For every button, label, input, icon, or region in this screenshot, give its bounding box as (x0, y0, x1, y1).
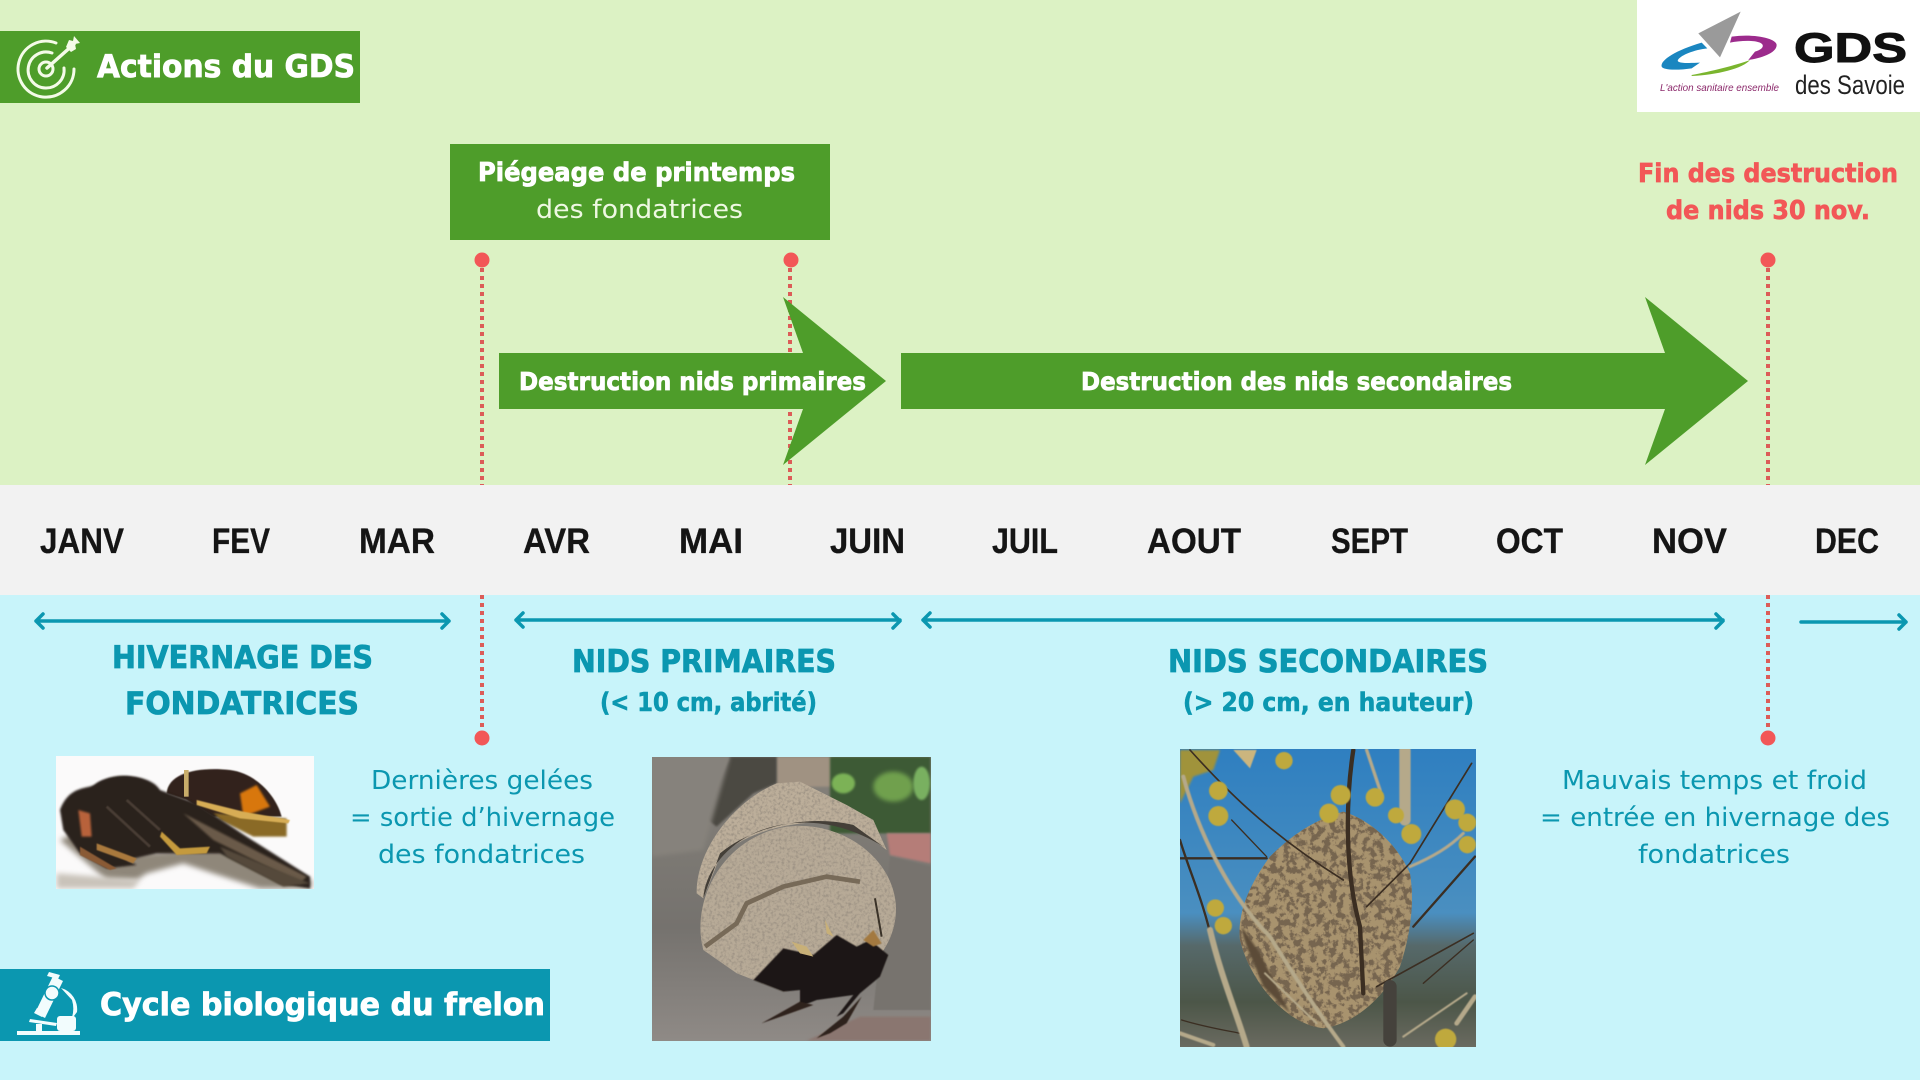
callout: fin des destructions (1638, 159, 1898, 226)
timeline: months: MAR (359, 522, 435, 561)
text: dernières gelées: Dernières gelées (371, 766, 593, 796)
callout: fin des destructions: Fin des destruction (1638, 159, 1898, 189)
timeline: months: JUIL (992, 522, 1058, 561)
arrows: period spans (36, 613, 1906, 629)
text: hivernage des fondatrices (112, 640, 373, 722)
timeline: months: AVR (523, 522, 590, 561)
heading: Cycle biologique du frelon: Cycle biologique du frelon (100, 987, 545, 1023)
callout: piégeage de printemps: Piégeage de printemps (478, 158, 795, 188)
photo: frelon fondatrice (56, 756, 314, 889)
text: hivernage des fondatrices: FONDATRICES (125, 686, 359, 722)
text: nids primaires: NIDS PRIMAIRES (572, 644, 836, 680)
text: hivernage des fondatrices: HIVERNAGE DES (112, 640, 373, 676)
text: mauvais temps et froid: fondatrices (1638, 840, 1790, 870)
logo: GDS des Savoie: L'action sanitaire ensemble (1660, 82, 1779, 94)
text: nids primaires (572, 644, 836, 718)
dotted timeline markers (482, 260, 1768, 738)
arrow: destruction nids primaires (499, 297, 886, 465)
text: dernières gelées (350, 766, 615, 870)
panel: cycle biologique background (0, 595, 1920, 1080)
callout: piégeage de printemps (450, 144, 830, 240)
heading: Actions du GDS: Actions du GDS (97, 49, 355, 85)
arrow: destruction des nids secondaires (901, 297, 1748, 465)
icon: target with arrow (18, 36, 80, 97)
arrow: destruction nids primaires: Destruction nids primaires (519, 367, 866, 396)
icon: microscope (17, 972, 80, 1035)
timeline: months: SEPT (1331, 522, 1408, 561)
timeline: months: NOV (1652, 522, 1728, 561)
logo: GDS des Savoie (1637, 0, 1920, 112)
arrow: destruction des nids secondaires: Destruction des nids secondaires (1081, 367, 1512, 396)
text: mauvais temps et froid (1540, 766, 1890, 870)
text: dernières gelées: des fondatrices (378, 840, 585, 870)
timeline: months: MAI (679, 522, 743, 561)
heading: Cycle biologique du frelon (0, 969, 550, 1041)
callout: fin des destructions: de nids 30 nov. (1666, 196, 1870, 226)
text: mauvais temps et froid: Mauvais temps et froid (1562, 766, 1867, 796)
text: dernières gelées: = sortie d’hivernage (350, 803, 615, 833)
logo: GDS des Savoie: GDS (1794, 24, 1907, 71)
text: nids secondaires (1168, 644, 1488, 718)
timeline: months: DEC (1815, 522, 1879, 561)
text: nids primaires: (< 10 cm, abrité) (600, 688, 817, 718)
timeline: months: AOUT (1147, 522, 1241, 561)
timeline: months: JANV (40, 522, 125, 561)
callout: piégeage de printemps: des fondatrices (536, 195, 743, 225)
photo: nid secondaire (1180, 749, 1476, 1050)
markers: red dots (474, 252, 1776, 746)
timeline: months: JUIN (830, 522, 905, 561)
heading: Actions du GDS (0, 31, 360, 103)
timeline: months (0, 485, 1920, 595)
text: mauvais temps et froid: = entrée en hivernage des (1540, 803, 1890, 833)
timeline: months: FEV (212, 522, 271, 561)
photo: nid primaire (652, 757, 931, 1041)
text: nids secondaires: (> 20 cm, en hauteur) (1183, 688, 1474, 718)
timeline: months: OCT (1496, 522, 1563, 561)
panel: actions du GDS background (0, 0, 1920, 485)
text: nids secondaires: NIDS SECONDAIRES (1168, 644, 1488, 680)
